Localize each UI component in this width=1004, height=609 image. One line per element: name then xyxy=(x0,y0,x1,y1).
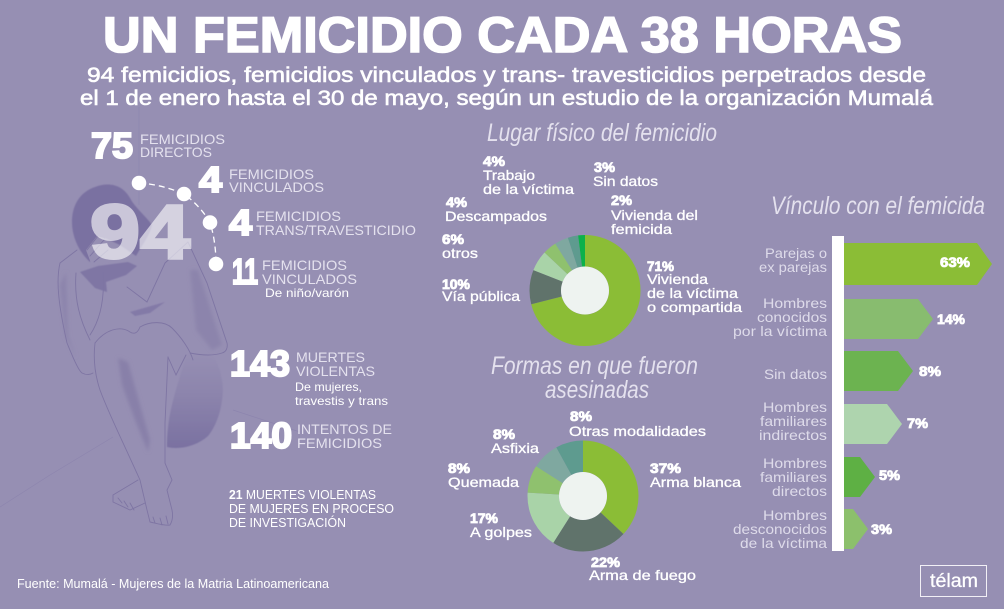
illustration: seated woman xyxy=(0,107,300,525)
heading: formas: Formas en que fueron xyxy=(491,352,698,380)
heading: lugar fisico: Lugar físico del femicidio xyxy=(487,119,717,147)
bar labels: vinculo: Hombres xyxy=(763,507,827,523)
labels: formas: Asfixia xyxy=(491,440,539,456)
stat: 4 femicidios trans xyxy=(229,202,416,243)
labels: lugar fisico: Descampados xyxy=(445,208,547,224)
bar labels: vinculo: familiares xyxy=(760,469,827,485)
labels: lugar fisico: Sin datos xyxy=(593,173,658,189)
labels: lugar fisico: de la víctima xyxy=(483,181,574,197)
title: UN FEMICIDIO CADA 38 HORAS xyxy=(103,7,902,63)
bar labels: vinculo: indirectos xyxy=(759,427,827,443)
stat: 143 muertes violentas: 143 xyxy=(230,343,290,384)
subtitle xyxy=(80,63,933,110)
stat: 4 femicidios trans: FEMICIDIOS xyxy=(256,208,341,224)
labels: lugar fisico: Vivienda xyxy=(647,271,708,287)
bar chart: vinculo: 14% xyxy=(937,312,965,327)
stat: 143 muertes violentas: MUERTES xyxy=(296,349,365,365)
bar labels: vinculo: Hombres xyxy=(763,399,827,415)
labels: lugar fisico: Trabajo xyxy=(483,167,535,183)
stat: 21 muertes en investigacion: DE INVESTIGACIÓN xyxy=(229,515,346,530)
stat: 11 femicidios vinculados: VINCULADOS xyxy=(262,271,357,287)
labels: formas: 8% xyxy=(493,427,515,442)
stat: 21 muertes en investigacion: DE MUJERES EN PROCESO xyxy=(229,502,394,516)
stat: 4 femicidios vinculados: VINCULADOS xyxy=(229,179,324,195)
bar labels: vinculo: conocidos xyxy=(757,309,827,325)
stat: 75 femicidios directos xyxy=(91,125,225,166)
bar labels: vinculo: Sin datos xyxy=(764,366,827,382)
donut chart: lugar fisico xyxy=(545,251,625,330)
labels: lugar fisico: o compartida xyxy=(647,299,742,315)
labels: lugar fisico: 71% xyxy=(647,259,674,274)
labels: formas xyxy=(448,409,741,583)
stat: 4 femicidios vinculados xyxy=(199,159,324,200)
bar labels: vinculo: Hombres xyxy=(763,295,827,311)
stat: 21 muertes en investigacion xyxy=(229,488,394,530)
labels: formas: Arma de fuego xyxy=(589,567,696,583)
bar chart: vinculo: 7% xyxy=(907,416,928,431)
stat: 4 femicidios trans: 4 xyxy=(229,202,252,243)
stat: 143 muertes violentas: travestis y trans xyxy=(295,394,388,408)
stat: 143 muertes violentas xyxy=(230,343,388,408)
labels: lugar fisico: 3% xyxy=(594,160,615,175)
stat: 4 femicidios trans: TRANS/TRAVESTICIDIO xyxy=(256,222,416,238)
heading: formas xyxy=(491,352,698,404)
bar chart: vinculo: 8% xyxy=(919,364,941,379)
labels: formas: A golpes xyxy=(470,524,532,540)
bar labels: vinculo: de la víctima xyxy=(740,535,827,551)
bar labels: vinculo: familiares xyxy=(760,413,827,429)
stat: 21 muertes en investigacion: 21 MUERTES VIOLENTAS xyxy=(229,488,376,502)
labels: lugar fisico: 2% xyxy=(611,193,632,208)
bar labels: vinculo: Hombres xyxy=(763,455,827,471)
stat: 75 femicidios directos: FEMICIDIOS xyxy=(140,131,225,147)
labels: lugar fisico: 10% xyxy=(442,277,470,292)
stat: 143 muertes violentas: VIOLENTAS xyxy=(296,363,375,379)
stat: 4 femicidios vinculados: FEMICIDIOS xyxy=(229,166,314,182)
stat: 11 femicidios vinculados: 11 xyxy=(232,251,258,292)
labels: formas: Arma blanca xyxy=(650,474,741,490)
dotted connector with nodes xyxy=(132,176,223,271)
labels: formas: 8% xyxy=(448,461,470,476)
logo: telam: télam xyxy=(930,571,978,592)
labels: lugar fisico: otros xyxy=(442,245,478,261)
stat: 140 intentos xyxy=(230,415,392,456)
stat: 140 intentos: 140 xyxy=(230,415,292,456)
labels: lugar fisico: de la víctima xyxy=(647,285,738,301)
stat: 11 femicidios vinculados: De niño/varón xyxy=(265,286,349,300)
subtitle: el 1 de enero hasta el 30 de mayo, según un estudio de la organización Mumalá xyxy=(80,86,933,110)
bar labels: vinculo: directos xyxy=(772,483,827,499)
subtitle: 94 femicidios, femicidios vinculados y trans- travesticidios perpetrados desde xyxy=(87,63,926,87)
stat: 75 femicidios directos: DIRECTOS xyxy=(140,144,212,160)
labels: formas: 37% xyxy=(650,461,681,476)
donut chart: formas xyxy=(543,456,623,536)
labels: lugar fisico: femicida xyxy=(611,221,672,237)
labels: formas: 22% xyxy=(591,555,620,570)
labels: formas: 8% xyxy=(570,409,592,424)
labels: formas: Otras modalidades xyxy=(569,423,706,439)
stat: 75 femicidios directos: 75 xyxy=(91,125,133,166)
stat: 11 femicidios vinculados: FEMICIDIOS xyxy=(262,257,347,273)
bar labels: vinculo: Parejas o xyxy=(765,245,827,261)
bar labels: vinculo: desconocidos xyxy=(733,521,827,537)
big total 94: 94 xyxy=(90,190,190,275)
bar chart: vinculo xyxy=(832,236,992,551)
labels: lugar fisico: Vivienda del xyxy=(611,207,698,223)
stat: 140 intentos: INTENTOS DE xyxy=(297,421,392,437)
labels: formas: Quemada xyxy=(448,474,519,490)
labels: lugar fisico: 4% xyxy=(483,154,505,169)
labels: lugar fisico xyxy=(442,154,742,315)
stat: 140 intentos: FEMICIDIOS xyxy=(297,435,382,451)
heading: formas: asesinadas xyxy=(545,376,649,404)
bar chart: vinculo: 5% xyxy=(879,468,900,483)
stat: 11 femicidios vinculados xyxy=(232,251,357,300)
stat: 143 muertes violentas: De mujeres, xyxy=(295,380,362,394)
stat: 4 femicidios vinculados: 4 xyxy=(199,159,222,200)
labels: lugar fisico: 4% xyxy=(446,195,467,210)
bar chart: vinculo: 3% xyxy=(871,522,892,537)
labels: lugar fisico: 6% xyxy=(442,232,464,247)
bar labels: vinculo xyxy=(733,245,827,551)
bar labels: vinculo: por la víctima xyxy=(733,323,827,339)
labels: lugar fisico: Vía pública xyxy=(442,288,520,304)
labels: formas: 17% xyxy=(470,511,498,526)
source: Fuente: Mumalá - Mujeres de la Matria Latinoamericana xyxy=(17,577,329,591)
bar labels: vinculo: ex parejas xyxy=(759,259,827,275)
logo: telam xyxy=(920,566,986,596)
bar chart: vinculo: 63% xyxy=(940,255,970,270)
